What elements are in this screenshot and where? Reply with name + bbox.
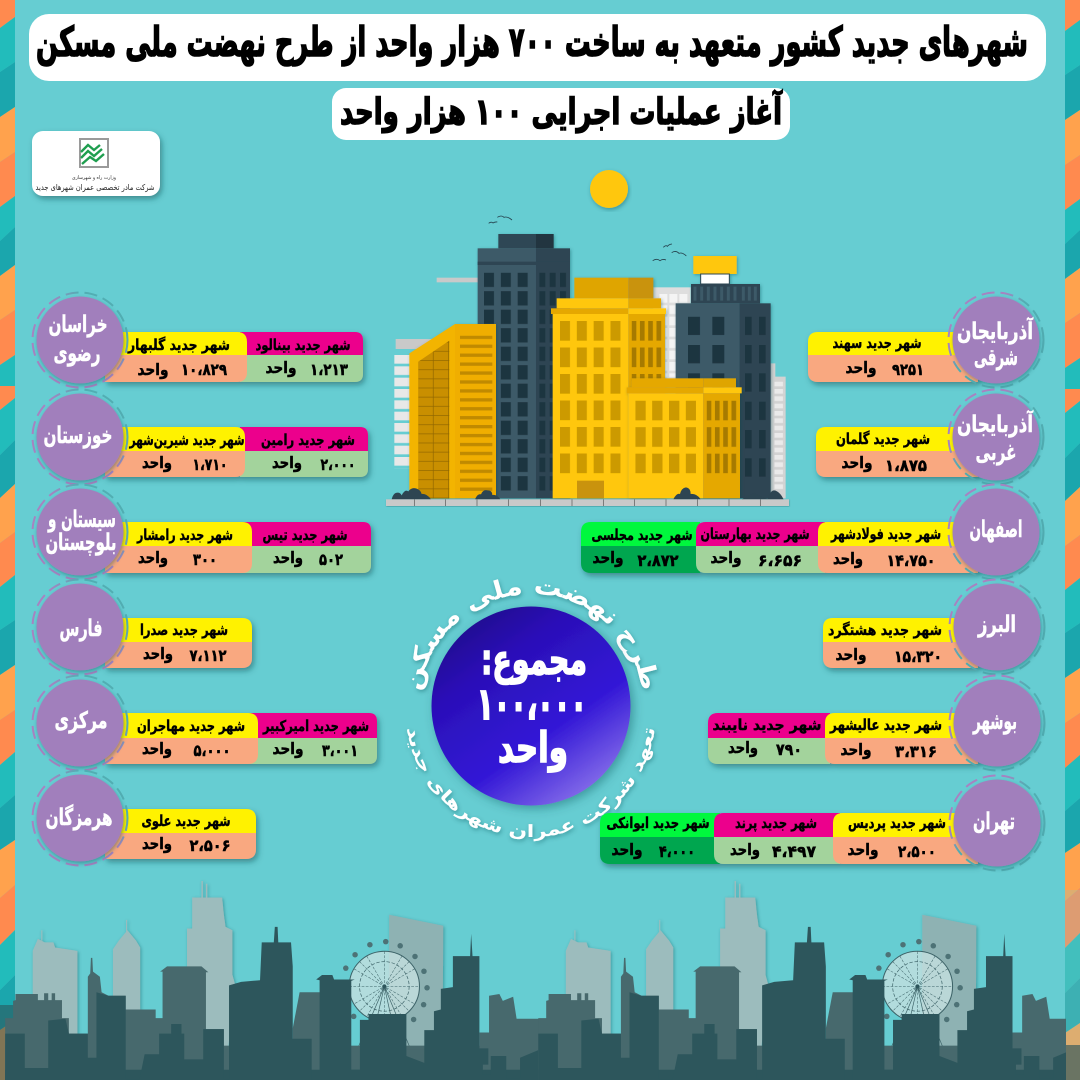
table: city units: واحد <box>836 645 866 664</box>
table: city units: ۱۵،۳۲۰ <box>894 647 942 666</box>
province circle: اصفهان <box>970 517 1022 543</box>
table: city units: شهر جدید بینالود <box>256 336 350 354</box>
subtitle banner: آغاز عملیات اجرایی ۱۰۰ هزار واحد <box>340 89 783 133</box>
province circle <box>32 580 128 674</box>
table: city units: ۲،۵۰۰ <box>898 842 936 861</box>
province circle <box>950 676 1044 770</box>
table: city units: ۷۹۰ <box>776 740 802 759</box>
province circle: فارس <box>60 616 102 642</box>
province: Bushehr <box>708 676 1044 770</box>
title banner <box>29 14 1046 81</box>
table: city units: ۱،۷۱۰ <box>192 455 228 474</box>
centre yellow building <box>551 278 666 498</box>
table: city units: واحد <box>833 549 863 568</box>
province circle: تهران <box>973 809 1015 835</box>
total text: ۱۰۰،۰۰۰ <box>477 679 587 730</box>
province circle <box>950 776 1044 870</box>
table: city units: ۱۴،۷۵۰ <box>886 551 936 570</box>
table: city units: شهر جدید شیرین‌شهر <box>129 431 244 449</box>
table: city units <box>808 332 978 382</box>
illustration: left skyline silhouette <box>5 881 541 1080</box>
right dark building with sign <box>676 256 771 498</box>
table: city units: ۶،۶۵۶ <box>758 551 802 570</box>
circular caption: new towns company commitment: تعهد شرکت عمران شهرهای جدید <box>406 728 657 845</box>
province circle: رضوی <box>54 341 100 367</box>
logo card: شرکت مادر تخصصی عمران شهرهای جدید <box>36 183 155 192</box>
province circle: هرمزگان <box>46 804 112 831</box>
table: city units: ۷،۱۱۲ <box>190 646 227 665</box>
table: city units: واحد <box>142 739 172 758</box>
province: Khuzestan <box>32 390 368 484</box>
province circle: آذربایجان <box>957 409 1034 438</box>
back grey buildings <box>394 278 786 498</box>
table: city units <box>105 427 368 477</box>
table: city units: شهر جدید گلبهار <box>127 336 230 354</box>
table: city units: واحد <box>143 644 173 663</box>
table: city units: واحد <box>612 840 642 859</box>
table: city units: ۲،۸۷۲ <box>638 551 679 570</box>
table: city units: واحد <box>848 840 878 859</box>
table: city units <box>816 427 978 477</box>
table: city units: شهر جدید امیرکبیر <box>262 717 369 735</box>
left yellow building <box>409 324 496 498</box>
table: city units: شهر جدید بهارستان <box>700 525 810 543</box>
mid-tone buildings <box>5 958 541 1080</box>
province: Isfahan <box>581 484 1044 580</box>
table: city units: واحد <box>840 740 872 759</box>
table: city units: ۴،۴۹۷ <box>772 842 816 861</box>
province circle: خوزستان <box>44 423 112 449</box>
illustration: city buildings <box>386 216 789 506</box>
table: city units <box>581 522 978 573</box>
table: city units: شهر جدید ایوانکی <box>606 814 710 832</box>
table: city units <box>105 713 377 764</box>
table: city units: واحد <box>730 840 760 859</box>
table: city units: ۱۰،۸۲۹ <box>181 360 227 379</box>
province circle: خراسان <box>48 312 108 338</box>
province: East Azerbaijan <box>808 292 1044 388</box>
total text: مجموع: <box>481 635 587 685</box>
province: Fars <box>32 580 252 674</box>
table: city units: شهر جدید عالیشهر <box>829 716 942 734</box>
table: city units: شهر جدید سهند <box>832 334 922 352</box>
province circle: غربی <box>976 440 1016 466</box>
table: city units: واحد <box>710 548 742 567</box>
table: city units: شهر جدید گلمان <box>836 430 930 448</box>
icon: company logo mark <box>80 139 108 167</box>
table: city units: شهر جدید رامشار <box>136 526 233 544</box>
table: city units <box>708 713 978 764</box>
table: city units: واحد <box>273 548 303 567</box>
table: city units: واحد <box>846 358 876 377</box>
table: city units: ۱،۸۷۵ <box>885 456 927 475</box>
province circle <box>948 484 1044 580</box>
table: city units: شهر جدید صدرا <box>140 621 228 639</box>
illustration: right skyline silhouette <box>538 881 1074 1080</box>
province circle: سیستان و <box>47 507 116 533</box>
centre total badge <box>406 579 659 845</box>
table: city units: واحد <box>142 834 172 853</box>
table: city units: واحد <box>272 453 302 472</box>
table: city units: شهر جدید فولادشهر <box>830 525 941 543</box>
table: city units: شهر جدید پردیس <box>848 814 946 833</box>
table: city units: شهر جدید تیس <box>262 526 348 544</box>
province circle: شرقی <box>974 345 1018 371</box>
province circle <box>32 484 128 580</box>
table: city units: ۳۰۰ <box>193 550 217 569</box>
table: city units: واحد <box>142 453 172 472</box>
table: city units: ۵۰۲ <box>319 550 343 569</box>
province: West Azerbaijan <box>816 390 1044 484</box>
table: city units: واحد <box>272 739 304 758</box>
table: city units <box>105 332 363 382</box>
table: city units: ۵،۰۰۰ <box>194 741 230 760</box>
table: city units: ۴،۰۰۰ <box>659 842 695 861</box>
icon: ferris wheel <box>343 939 430 1047</box>
table: city units: ۱،۲۱۳ <box>310 360 348 379</box>
table: city units: شهر جدید علوی <box>142 812 230 830</box>
left decorative strip <box>0 0 15 1080</box>
province: Hormozgan <box>32 770 256 866</box>
table: city units: واحد <box>592 548 624 567</box>
province circle: بلوچستان <box>46 530 116 556</box>
table: city units: واحد <box>266 358 296 377</box>
table: city units: واحد <box>728 738 758 757</box>
bushes <box>392 487 784 499</box>
front yellow building <box>627 378 742 498</box>
strip fade overlays <box>0 890 1080 1080</box>
circular caption: national housing plan: طرح نهضت ملی مسکن <box>412 579 659 694</box>
total text: واحد <box>498 723 568 773</box>
right decorative strip <box>1065 0 1080 1080</box>
province: Alborz <box>823 580 1044 674</box>
table: city units: ۳،۰۰۱ <box>322 741 358 760</box>
province circle <box>950 580 1044 674</box>
icon: sun <box>590 170 628 208</box>
total text <box>477 635 587 773</box>
province circle <box>32 390 128 484</box>
province: Sistan and Baluchestan <box>32 484 371 580</box>
province circle: بوشهر <box>972 709 1017 735</box>
table: city units: ۲،۰۰۰ <box>320 455 356 474</box>
table: city units <box>105 809 256 859</box>
dark foreground buildings <box>5 927 541 1080</box>
table: city units <box>105 618 252 668</box>
table: city units <box>600 813 978 864</box>
table: city units: شهر جدید پرند <box>735 814 817 833</box>
table: city units: واحد <box>138 548 168 567</box>
subtitle banner <box>332 88 790 140</box>
table: city units: شهر جدید هشتگرد <box>828 621 942 639</box>
birds <box>489 216 686 261</box>
province: Khorasan Razavi <box>32 292 363 388</box>
ground <box>386 499 789 506</box>
province circle <box>32 770 128 866</box>
logo card <box>32 131 160 196</box>
logo card: وزارت راه و شهرسازی <box>72 175 117 181</box>
table: city units: واحد <box>842 453 872 472</box>
total circle <box>432 606 630 806</box>
province circle: مرکزی <box>54 708 108 734</box>
pale towers <box>33 881 443 1047</box>
table: city units: شهر جدید مجلسی <box>592 526 692 544</box>
province circle <box>948 390 1044 484</box>
province circle: آذربایجان <box>957 316 1034 345</box>
table: city units <box>823 618 978 668</box>
table: city units: واحد <box>138 360 168 379</box>
table: city units: شهر جدید رامین <box>261 431 355 449</box>
table: city units: ۲،۵۰۶ <box>190 836 230 855</box>
province: Tehran <box>600 776 1044 870</box>
province: Markazi <box>32 676 377 770</box>
table: city units: شهر جدید مهاجران <box>137 717 245 735</box>
table: city units: ۳،۳۱۶ <box>895 742 937 761</box>
province circle <box>948 292 1044 388</box>
table: city units: ۹۲۵۱ <box>892 360 924 379</box>
province circle <box>32 292 128 388</box>
province circle: البرز <box>977 612 1016 638</box>
province circle <box>32 676 128 770</box>
dark tower <box>478 234 570 498</box>
table: city units <box>105 522 371 573</box>
table: city units: شهر جدید نایبند <box>712 716 822 734</box>
